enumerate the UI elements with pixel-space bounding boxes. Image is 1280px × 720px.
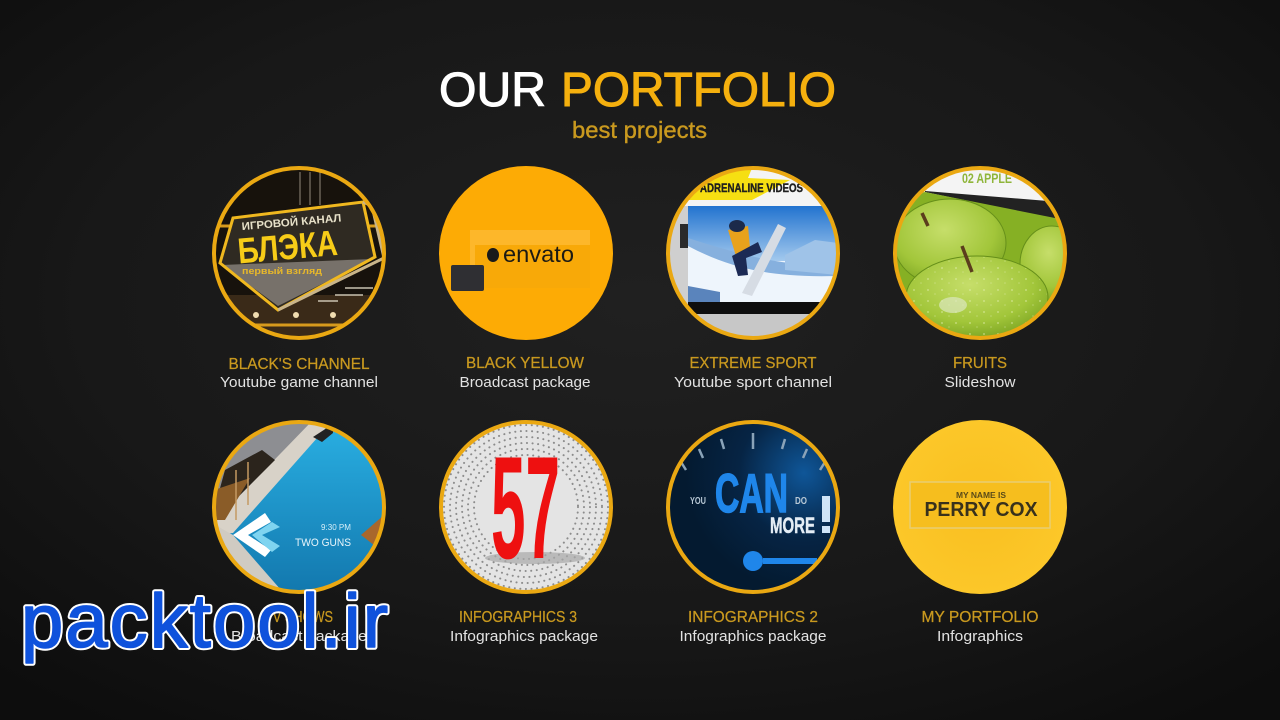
label: INFOGRAPHICS 2 xyxy=(688,609,818,626)
thumbnail: blue diagonal slide: 9:30 PM xyxy=(321,523,351,532)
thumbnail: green apples xyxy=(890,165,1084,338)
label: TV SHOWS xyxy=(265,609,333,626)
thumbnail: you can do more gauge: MORE xyxy=(770,513,815,538)
watermark: packtool.ir xyxy=(21,579,388,664)
thumbnail: number 57: 57 xyxy=(491,426,560,589)
label: EXTREME SPORT xyxy=(690,355,817,372)
thumbnail: snowboarder video: ADRENALINE VIDEOS xyxy=(700,181,803,195)
thumbnail: Perry Cox name card: PERRY COX xyxy=(924,499,1038,521)
description: Slideshow xyxy=(944,374,1016,391)
thumbnail: green apples: 02 APPLE xyxy=(962,170,1012,186)
item: TV Shows xyxy=(210,420,390,645)
description: Infographics package xyxy=(450,628,598,645)
description: Infographics xyxy=(937,628,1023,645)
title: OUR xyxy=(439,64,546,117)
label: BLACK'S CHANNEL xyxy=(228,356,370,373)
label: INFOGRAPHICS 3 xyxy=(459,609,577,626)
thumbnail: envato logo xyxy=(439,166,613,340)
thumbnail: blue diagonal slide xyxy=(210,420,390,595)
label: FRUITS xyxy=(953,355,1007,372)
title xyxy=(439,64,836,117)
thumbnail: neon channel sign: первый взгляд xyxy=(242,266,322,276)
thumbnail: number 57 xyxy=(441,422,611,592)
description: Broadcast package xyxy=(460,374,590,391)
thumbnail: Perry Cox name card: MY NAME IS xyxy=(956,491,1007,500)
item: Black's Channel xyxy=(210,168,390,391)
subtitle: best projects xyxy=(572,117,707,143)
description: Youtube sport channel xyxy=(674,374,832,391)
description: Broadcast package xyxy=(231,628,367,645)
label: MY PORTFOLIO xyxy=(922,609,1038,626)
description: Youtube game channel xyxy=(220,374,378,391)
thumbnail: neon channel sign: БЛЭКА xyxy=(236,222,339,272)
item: Infographics 3 xyxy=(441,422,611,645)
item: My Portfolio xyxy=(893,420,1067,645)
title: PORTFOLIO xyxy=(561,64,836,117)
thumbnail: Perry Cox name card xyxy=(893,420,1067,594)
thumbnail: you can do more gauge: YOU xyxy=(690,496,706,507)
item: Extreme Sport xyxy=(668,168,838,391)
thumbnail: you can do more gauge: DO xyxy=(795,496,807,507)
thumbnail: blue diagonal slide: TWO GUNS xyxy=(295,537,351,549)
thumbnail: snowboarder video xyxy=(668,168,838,340)
label: BLACK YELLOW xyxy=(466,355,584,372)
description: Infographics package xyxy=(680,628,826,645)
watermark: packtool.ir xyxy=(21,579,388,664)
thumbnail: you can do more gauge: CAN xyxy=(715,462,788,524)
thumbnail: you can do more gauge xyxy=(668,422,838,592)
item: Infographics 2 xyxy=(668,422,838,645)
item: Black Yellow xyxy=(439,166,613,391)
thumbnail: neon channel sign xyxy=(210,168,390,340)
item: Fruits xyxy=(893,166,1067,387)
thumbnail: neon channel sign: ИГРОВОЙ КАНАЛ xyxy=(241,211,342,233)
thumbnail: envato logo: envato xyxy=(503,241,574,267)
